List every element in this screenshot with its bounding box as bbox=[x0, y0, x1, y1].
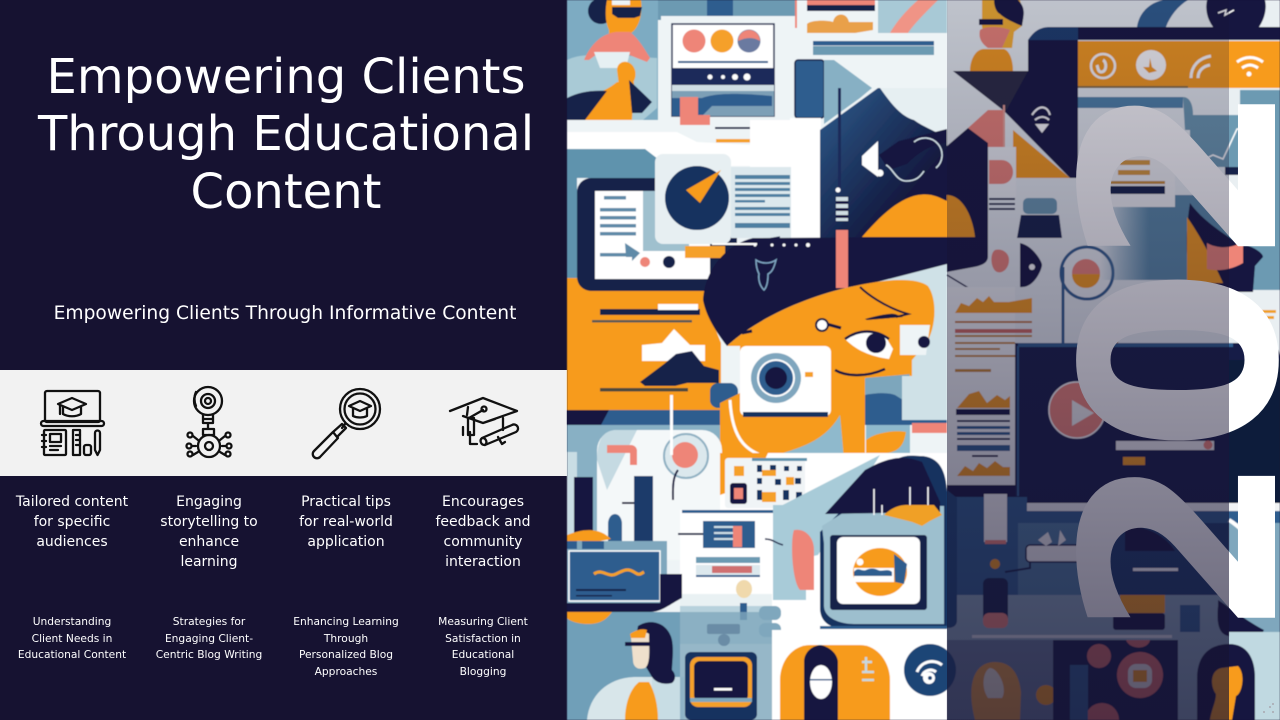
icon: graduation cap and diploma bbox=[450, 398, 518, 445]
orange hat patch right bbox=[947, 195, 975, 237]
icon: laptop with study tools bbox=[41, 391, 104, 455]
caption 4: Educational bbox=[452, 648, 514, 661]
feature text 1 bbox=[16, 494, 128, 550]
illustration background bbox=[567, 0, 1280, 720]
feature text 2: enhance bbox=[179, 534, 239, 550]
watermark dots bbox=[1263, 703, 1274, 713]
feature text 3: Practical tips bbox=[301, 494, 391, 510]
caption 2: Engaging Client- bbox=[165, 632, 253, 645]
caption 1: Educational Content bbox=[18, 648, 126, 661]
feature text 4: community bbox=[444, 534, 522, 550]
folder left bbox=[567, 530, 682, 720]
mid left band and panel bbox=[567, 395, 722, 560]
caption 4: Blogging bbox=[460, 665, 506, 678]
caption 4: Satisfaction in bbox=[445, 632, 521, 645]
caption 2: Centric Blog Writing bbox=[156, 648, 262, 661]
top centre monitor bbox=[658, 0, 795, 166]
title: Through Educational bbox=[38, 106, 534, 162]
caption 3 bbox=[293, 615, 399, 678]
caption 4: Measuring Client bbox=[438, 615, 528, 628]
feature text 4 bbox=[435, 494, 531, 570]
panel: icon band bbox=[0, 370, 567, 476]
top band panel bbox=[795, 0, 948, 60]
monitor with orange icon bbox=[820, 456, 969, 629]
caption 1 bbox=[18, 615, 126, 661]
title bbox=[38, 49, 534, 220]
feature text 3 bbox=[299, 494, 393, 550]
face with glasses bbox=[720, 264, 947, 453]
caption 3: Personalized Blog bbox=[299, 648, 393, 661]
caption 3: Through bbox=[324, 632, 368, 645]
feature text 2: storytelling to bbox=[160, 514, 258, 530]
icon: magnifier with cap bbox=[313, 389, 380, 458]
right top region bbox=[947, 0, 1280, 350]
camera bbox=[730, 346, 844, 460]
translucent overlay panel bbox=[947, 0, 1229, 720]
title: Content bbox=[191, 164, 381, 220]
feature text 1: audiences bbox=[36, 534, 108, 550]
feature text 2: Engaging bbox=[176, 494, 242, 510]
feature text 3: for real-world bbox=[299, 514, 393, 530]
feature text 4: Encourages bbox=[442, 494, 524, 510]
caption 2 bbox=[156, 615, 262, 661]
lower right scene bbox=[947, 494, 1280, 720]
feature text 2 bbox=[160, 494, 258, 570]
bottom woman bbox=[587, 612, 772, 720]
large navy hat bbox=[703, 88, 988, 346]
top left woman with cup bbox=[567, 0, 658, 120]
phone and slanted block bbox=[790, 60, 872, 238]
feature text 2: learning bbox=[180, 554, 238, 570]
big central dark monitor bbox=[1015, 343, 1280, 523]
document tile bbox=[678, 505, 814, 646]
navy hat right end bbox=[947, 128, 988, 272]
feature text 4: interaction bbox=[445, 554, 521, 570]
icon row bbox=[40, 386, 520, 460]
title: Empowering Clients bbox=[47, 49, 525, 105]
feature text 4: feedback and bbox=[435, 514, 531, 530]
small document cards bbox=[947, 147, 1062, 305]
caption 3: Approaches bbox=[315, 665, 377, 678]
white area and orange arch bbox=[772, 630, 947, 720]
house right edge bbox=[947, 490, 957, 628]
right top monitor panel bbox=[1078, 90, 1280, 343]
feature text 1: Tailored content bbox=[16, 494, 128, 510]
wifi circle badge bbox=[904, 644, 956, 696]
left tablet bbox=[567, 132, 773, 291]
caption 2: Strategies for bbox=[173, 615, 245, 628]
bottom device bbox=[685, 652, 757, 720]
panel: left navy column bbox=[0, 0, 567, 720]
feature text 3: application bbox=[307, 534, 385, 550]
feature text 1: for specific bbox=[34, 514, 110, 530]
caption 3: Enhancing Learning bbox=[293, 615, 399, 628]
dotted grid panel bbox=[720, 453, 947, 633]
caption 4 bbox=[438, 615, 528, 678]
chart panel with pie bbox=[655, 120, 821, 244]
left notes column bbox=[947, 287, 1032, 497]
icon: lightbulb gear network bbox=[186, 387, 232, 457]
left orange block bbox=[567, 278, 738, 410]
spiral ring bbox=[1061, 247, 1113, 343]
caption 1: Understanding bbox=[33, 615, 111, 628]
caption 1: Client Needs in bbox=[32, 632, 112, 645]
subtitle: Empowering Clients Through Informative Content bbox=[54, 303, 516, 324]
